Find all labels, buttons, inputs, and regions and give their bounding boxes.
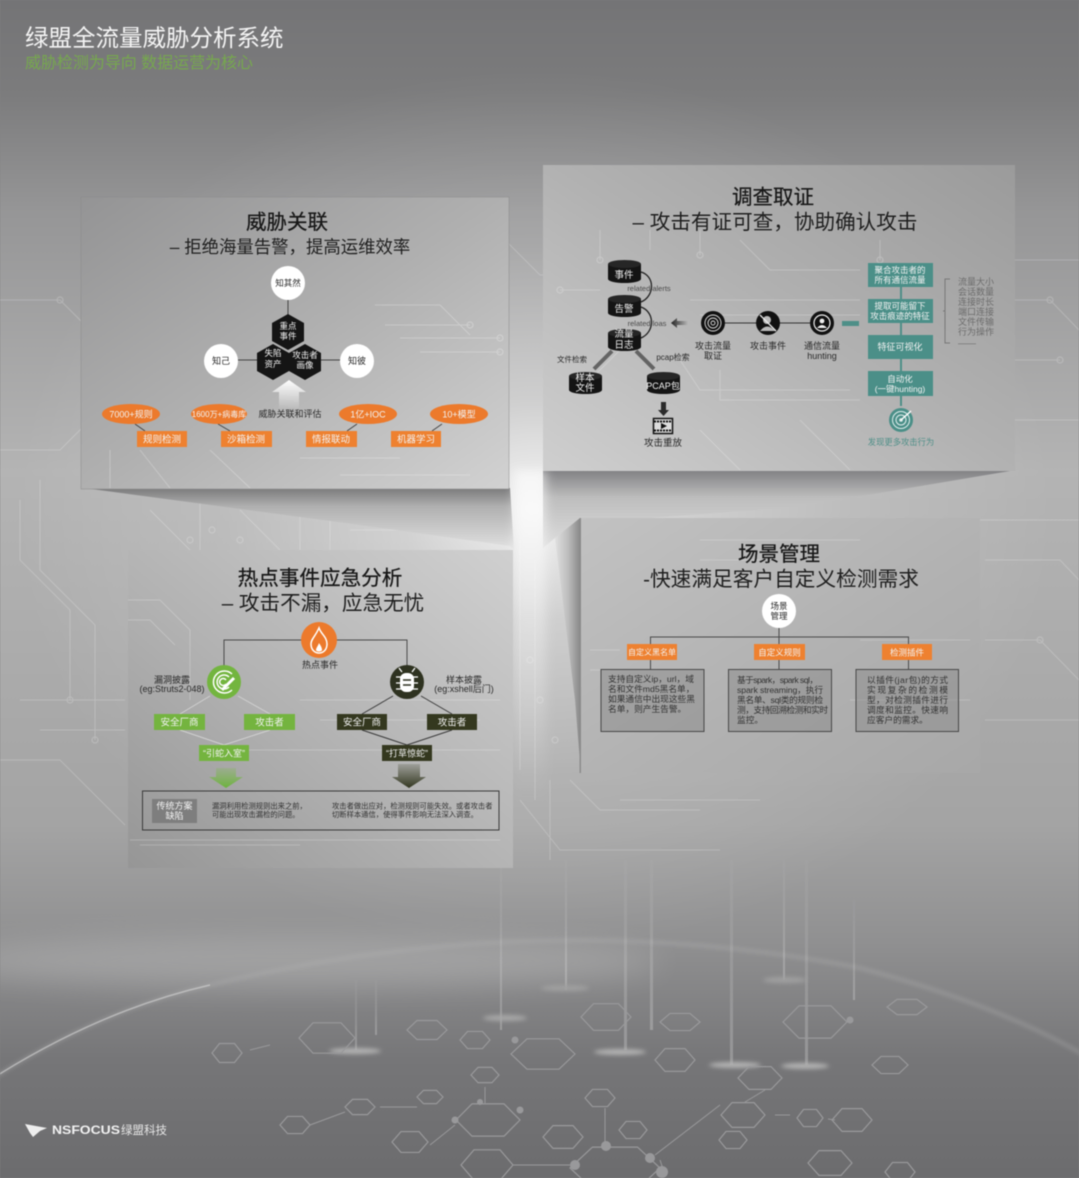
panel: scenario management <box>580 518 980 773</box>
callout: traditional drawbacks <box>142 791 499 830</box>
label: sample <box>434 674 494 694</box>
text box: blacklist: 支持自定义ip，url，域 <box>608 673 694 684</box>
database: PCAP包: PCAP包 <box>646 380 680 391</box>
label: sample: (eg:xshell后门) <box>434 683 494 694</box>
label: traffic evidence <box>695 340 731 361</box>
green tags <box>154 714 295 761</box>
step: 特征可视化: 特征可视化 <box>877 341 923 352</box>
label: vulnerability: (eg:Struts2-048) <box>139 684 205 694</box>
logo: NSFOCUS: NSFOCUS <box>52 1125 120 1137</box>
step: 提取特征: 攻击痕迹的特征 <box>870 311 930 321</box>
teal dash <box>842 321 859 326</box>
background circuit traces <box>0 240 1079 860</box>
label: discover more: 发现更多攻击行为 <box>868 437 934 447</box>
arcs between databases <box>641 272 652 338</box>
text box: plugin: 调度和监控。快速响 <box>867 704 948 715</box>
step: 聚合攻击者: 聚合攻击者的 <box>874 265 926 275</box>
text box: rules: 基于spark，spark sql， <box>737 674 818 685</box>
database: 告警 <box>608 295 641 317</box>
shadow wedge under investigation panel <box>543 470 1016 548</box>
orange tag: sandbox detection: 1600万+病毒库 <box>192 409 246 419</box>
database: 样本文件 <box>569 372 602 394</box>
label: related loas: related loas <box>628 319 667 328</box>
circle: 知彼: 知彼 <box>348 355 366 366</box>
database: 流量日志 <box>608 328 641 351</box>
database: 流量日志: 日志 <box>614 339 634 351</box>
arrow to replay <box>658 402 669 416</box>
label: 威胁关联和评估: 威胁关联和评估 <box>258 408 322 419</box>
metric list: 文件传输 <box>958 316 994 327</box>
step: 自动化 <box>868 371 933 396</box>
title: 绿盟全流量威胁分析系统 <box>25 25 284 51</box>
callout: traditional drawbacks: 缺陷 <box>165 810 184 821</box>
arrow dark <box>392 764 426 788</box>
step: 提取特征: 提取可能留下 <box>874 301 926 311</box>
panel: investigation and forensics <box>543 165 1015 471</box>
hexagon: 重点事件: 事件 <box>279 331 297 341</box>
text box: rules: spark streaming，执行 <box>737 684 823 695</box>
database: 流量日志: 流量 <box>614 328 634 340</box>
metric list: 流量大小 <box>958 276 994 287</box>
arrow green <box>209 768 243 788</box>
orange tag: rule detection: 7000+规则 <box>109 408 153 420</box>
logo: NSFOCUS <box>25 1123 167 1137</box>
circle: 知己: 知己 <box>212 355 230 366</box>
dark tags: 安全厂商 <box>343 716 381 728</box>
bracket <box>943 279 950 343</box>
text box: blacklist: 如果通信中出现这些黑 <box>608 693 695 704</box>
orange tag: threat intelligence <box>306 404 397 447</box>
text box: plugin: 应客户的需求。 <box>867 714 928 725</box>
step: 聚合攻击者 <box>868 263 933 287</box>
hexagon: 重点事件 <box>272 314 304 350</box>
text box: plugin: 以插件(jar包)的方式 <box>867 674 948 685</box>
text box: rules <box>728 670 832 732</box>
metric list: 端口连接 <box>958 306 994 317</box>
label: vulnerability <box>139 674 205 694</box>
database: 事件: 事件 <box>614 269 634 281</box>
text box: blacklist <box>601 670 704 732</box>
icon: attack event <box>756 311 780 335</box>
dark branch connectors <box>362 696 452 745</box>
hexagon: 失陷资产: 失陷 <box>264 348 282 358</box>
panel: hot event emergency analysis <box>128 550 513 868</box>
label: file search: 文件检索 <box>557 354 587 364</box>
label: hunting: hunting <box>807 351 837 361</box>
panel: threat correlation <box>81 197 509 489</box>
hub connectors <box>238 300 340 360</box>
orange tag: rule detection: 规则检测 <box>143 434 181 446</box>
shadow wedge under threat correlation panel <box>84 488 514 550</box>
label: traffic evidence: 攻击流量 <box>695 340 731 351</box>
subheading: -快速满足客户自定义检测需求 <box>643 568 919 591</box>
label: hunting <box>804 340 840 361</box>
icon: flame <box>301 622 337 658</box>
orange tag: threat intelligence: 1亿+IOC <box>350 408 386 420</box>
subheading: – 攻击有证可查，协助确认攻击 <box>633 211 917 234</box>
metric list <box>958 276 994 348</box>
icon: hunting <box>810 311 834 335</box>
callout: traditional drawbacks: 攻击者做出应对，检测规则可能失效。或者攻击者 <box>332 802 493 810</box>
vertical data streams and globe <box>0 860 1079 1080</box>
hexagon: 重点事件: 重点 <box>279 321 297 331</box>
text box: rules: 监控。 <box>737 714 763 725</box>
hexagon: 攻击者画像: 攻击者 <box>292 350 318 360</box>
circle: 场景管理: 管理 <box>770 611 788 621</box>
heading: 调查取证 <box>732 186 814 209</box>
step: 提取特征 <box>868 299 933 323</box>
dark tags <box>337 714 477 761</box>
arrows from traffic logs <box>594 351 654 369</box>
step: 自动化: 自动化 <box>887 374 913 384</box>
light band between panels <box>514 470 546 800</box>
callout: traditional drawbacks: 可能出现攻击漏检的问题。 <box>212 810 300 819</box>
logo: NSFOCUS: 绿盟科技 <box>121 1123 167 1137</box>
label: sample: 样本披露 <box>446 674 482 685</box>
orange tag: sandbox detection <box>191 404 272 447</box>
connector <box>725 322 810 324</box>
text box: blacklist: 名单，则产生告警。 <box>608 703 686 714</box>
green tags: 攻击者 <box>255 716 284 728</box>
database: 告警: 告警 <box>614 303 634 315</box>
step: 聚合攻击者: 所有通信流量 <box>874 275 926 285</box>
icon: vulnerability <box>207 665 241 699</box>
icon: bug <box>390 665 424 699</box>
callout: traditional drawbacks: 漏洞利用检测规则出来之前， <box>212 802 307 810</box>
heading: 热点事件应急分析 <box>238 567 402 590</box>
icon: target <box>889 408 913 432</box>
text box: plugin: 实现复杂的检测模 <box>867 684 948 695</box>
tree connectors <box>650 620 908 669</box>
circle: 知彼 <box>340 344 374 378</box>
label: traffic evidence: 取证 <box>704 351 722 361</box>
icon: fingerprint <box>701 311 725 335</box>
database: 样本文件: 样本 <box>575 372 595 384</box>
circle: 场景管理 <box>762 594 796 628</box>
orange tag: machine learning: 10+模型 <box>442 410 476 420</box>
orange tag: machine learning <box>391 404 488 447</box>
icon: film <box>654 418 672 434</box>
circle: 场景管理: 场景 <box>770 601 788 611</box>
text box: rules: 测，支持回溯检测和实时 <box>737 704 828 715</box>
database: 事件 <box>608 260 641 283</box>
orange tag: rule detection <box>102 404 187 447</box>
label: pcap search: pcap检索 <box>656 352 690 362</box>
label: hunting: 通信流量 <box>804 340 840 351</box>
tree connectors <box>224 640 407 668</box>
shadow wedge left of scenario panel <box>555 518 581 774</box>
label: replay: 攻击重放 <box>644 437 682 449</box>
text box: blacklist: 名和文件md5黑名单， <box>608 683 694 694</box>
tag: custom blacklist: 自定义黑名单 <box>628 647 676 657</box>
metric list: 会话数量 <box>958 286 994 297</box>
teal flow connectors <box>900 287 902 406</box>
database: 样本文件: 文件 <box>575 382 595 394</box>
tag: custom rule <box>754 644 805 660</box>
orange tag: sandbox detection: 沙箱检测 <box>227 434 265 446</box>
hexagon: 攻击者画像: 画像 <box>296 360 314 370</box>
metric list: —— <box>958 338 976 348</box>
tag: detection plugin: 检测插件 <box>890 648 924 658</box>
orange tag: machine learning: 机器学习 <box>397 434 435 446</box>
dark tags: 攻击者 <box>438 716 466 728</box>
label: hot event: 热点事件 <box>302 659 338 670</box>
heading: 场景管理 <box>738 543 820 566</box>
tag: detection plugin <box>882 644 932 660</box>
hexagon: 攻击者画像 <box>289 344 321 380</box>
callout: traditional drawbacks: 切断样本通信，使得事件影响无法深入调查。 <box>332 810 478 819</box>
dark tags: “打草惊蛇” <box>386 748 428 758</box>
step: 自动化: (一键hunting) <box>875 384 925 394</box>
molecule network <box>212 999 927 1178</box>
orange tag: threat intelligence: 情报联动 <box>312 434 350 446</box>
label: vulnerability: 漏洞披露 <box>154 674 190 685</box>
tag: custom rule: 自定义规则 <box>758 648 801 658</box>
text box: plugin <box>856 670 958 732</box>
heading: 威胁关联 <box>246 211 328 234</box>
hexagon: 失陷资产 <box>257 344 289 380</box>
subtitle: 威胁检测为导向 数据运营为核心 <box>25 54 253 72</box>
hexagon: 失陷资产: 资产 <box>264 359 282 369</box>
text box: rules: 黑名单、sql类的规则检 <box>737 694 823 705</box>
callout: traditional drawbacks: 传统方案 <box>156 800 193 811</box>
step: 特征可视化 <box>868 335 933 359</box>
circle: 知己 <box>204 344 238 378</box>
metric list: 连接时长 <box>958 296 994 307</box>
title <box>25 25 284 72</box>
green tags: 安全厂商 <box>160 716 199 728</box>
label: attack event: 攻击事件 <box>750 340 786 351</box>
arrow left <box>671 318 688 328</box>
green branch connectors <box>180 696 270 745</box>
arrow up <box>272 380 306 410</box>
tag: custom blacklist <box>627 644 677 660</box>
subheading: – 拒绝海量告警，提高运维效率 <box>170 237 410 257</box>
label: related alerts: related alerts <box>627 284 671 293</box>
text box: plugin: 型，对检测插件进行 <box>867 694 948 705</box>
circle: 知其然 <box>271 266 305 300</box>
green tags: “引蛇入室” <box>203 748 245 758</box>
database: PCAP包 <box>646 372 680 394</box>
subheading: – 攻击不漏，应急无忧 <box>222 592 424 615</box>
circle: 知其然: 知其然 <box>275 278 301 288</box>
metric list: 行为操作 <box>958 326 994 337</box>
